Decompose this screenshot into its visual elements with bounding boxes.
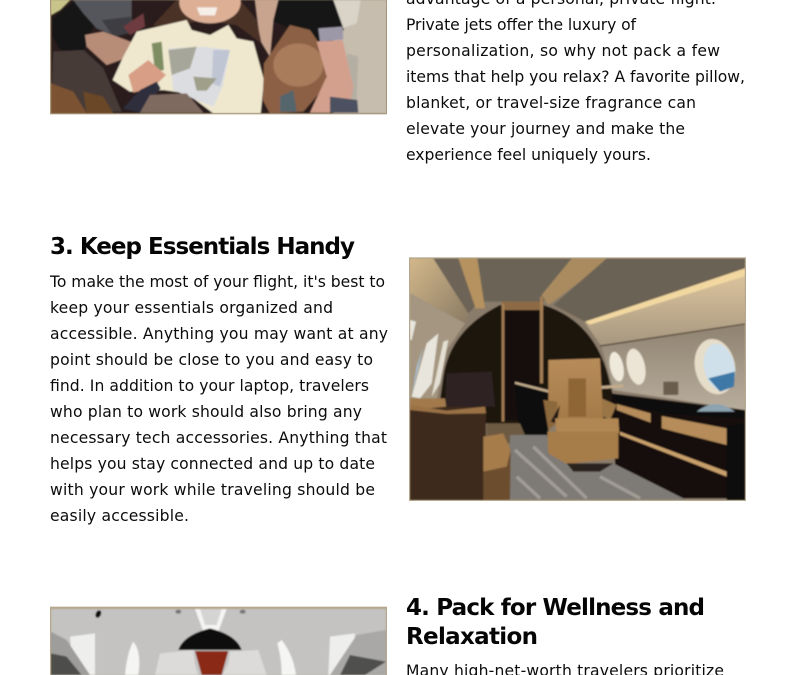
text block: tip 2 closing paragraph: Private jets offer the luxury of [406, 16, 636, 34]
text block: tip 2 closing paragraph: experience feel uniquely yours. [406, 146, 651, 164]
text block: keep essentials paragraph: point should be close to you and easy to [50, 351, 373, 369]
text block: keep essentials paragraph: easily accessible. [50, 507, 189, 525]
photo: girl with dogs on a private jet [50, 0, 387, 114]
text block: keep essentials paragraph: who plan to work should also bring any [50, 403, 362, 421]
text block: keep essentials paragraph: keep your essentials organized and [50, 299, 333, 317]
heading: 4. Pack for Wellness and Relaxation [406, 595, 705, 650]
heading: 4. Pack for Wellness and Relaxation: Relaxation [406, 624, 538, 650]
text block: keep essentials paragraph: helps you stay connected and up to date [50, 455, 375, 473]
text block: keep essentials paragraph: necessary tech accessories. Anything that [50, 429, 387, 447]
text block: keep essentials paragraph: with your work while traveling should be [50, 481, 375, 499]
heading: 4. Pack for Wellness and Relaxation: 4. Pack for Wellness and [406, 595, 705, 621]
text block: tip 2 closing paragraph [406, 0, 745, 164]
text block: keep essentials paragraph: find. In addition to your laptop, travelers [50, 377, 369, 395]
text block: keep essentials paragraph [49, 273, 388, 525]
text block: tip 2 closing paragraph: elevate your journey and make the [406, 120, 685, 138]
text block: keep essentials paragraph: To make the most of your flight, it's best to [49, 273, 385, 291]
photo: luxury jet cabin with tan seats [409, 257, 746, 501]
photo: white jet cabin with red aisle [50, 607, 387, 675]
text block: tip 2 closing paragraph: blanket, or travel-size fragrance can [406, 94, 696, 112]
text block: keep essentials paragraph: accessible. Anything you may want at any [50, 325, 388, 343]
text block: tip 2 closing paragraph: personalization, so why not pack a few [406, 42, 720, 60]
heading: 3. Keep Essentials Handy: 3. Keep Essentials Handy [50, 234, 355, 260]
text block: tip 2 closing paragraph: items that help you relax? A favorite pillow, [406, 68, 745, 86]
